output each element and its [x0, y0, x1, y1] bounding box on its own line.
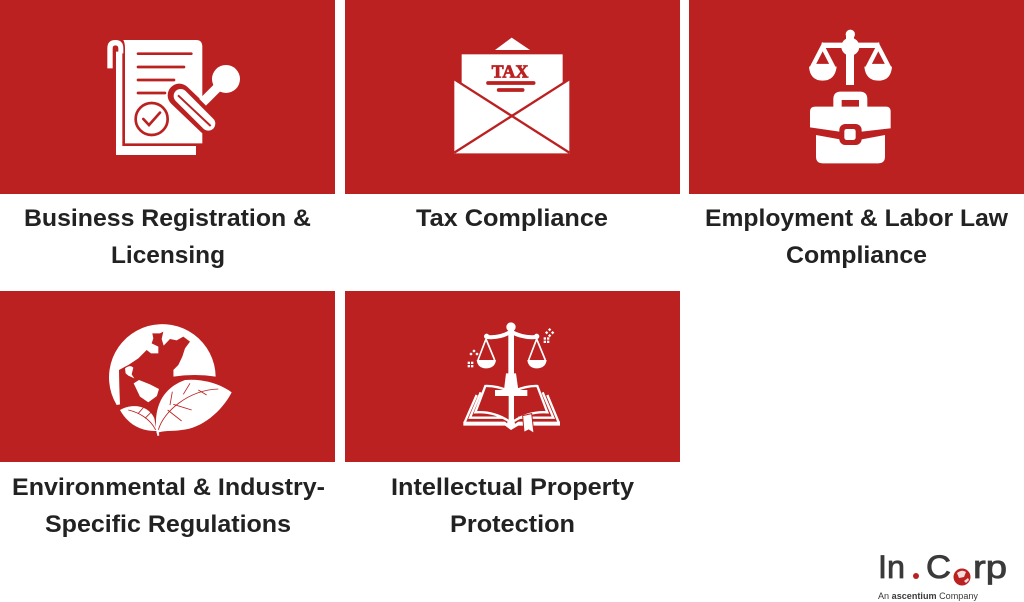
panel: employment and labor law [689, 0, 1024, 194]
icon: scales and briefcase [809, 30, 892, 163]
heading: employment and labor law: Compliance [786, 242, 927, 269]
logo: InCorp: An ascentium Company [878, 591, 978, 601]
heading: business registration: Business Registration & [24, 205, 311, 232]
heading: employment and labor law [705, 205, 1008, 269]
heading: business registration: Licensing [111, 242, 225, 269]
icon: scales on open book [463, 322, 560, 433]
heading: tax compliance: Tax Compliance [416, 205, 608, 232]
heading: environmental regulations [12, 474, 325, 538]
panel: business registration [0, 0, 335, 194]
logo: InCorp: In [878, 549, 905, 585]
icon: tax envelope: TAX [492, 61, 528, 81]
icon: tax envelope [454, 38, 569, 153]
logo: InCorp: C [926, 549, 951, 585]
heading: environmental regulations: Specific Regulations [45, 511, 291, 538]
panel: environmental regulations [0, 291, 335, 462]
heading: environmental regulations: Environmental & Industry- [12, 474, 325, 501]
heading: intellectual property: Intellectual Property [391, 474, 635, 501]
heading: business registration [24, 205, 311, 269]
heading: intellectual property [391, 474, 635, 538]
icon: document and stamp [107, 40, 240, 155]
icon: globe with leaves [109, 324, 232, 436]
logo: InCorp [878, 549, 1007, 601]
logo: InCorp: rp [973, 549, 1007, 585]
panel: tax compliance [345, 0, 680, 194]
heading: intellectual property: Protection [450, 511, 575, 538]
heading: employment and labor law: Employment & Labor Law [705, 205, 1008, 232]
panel: intellectual property [345, 291, 680, 462]
